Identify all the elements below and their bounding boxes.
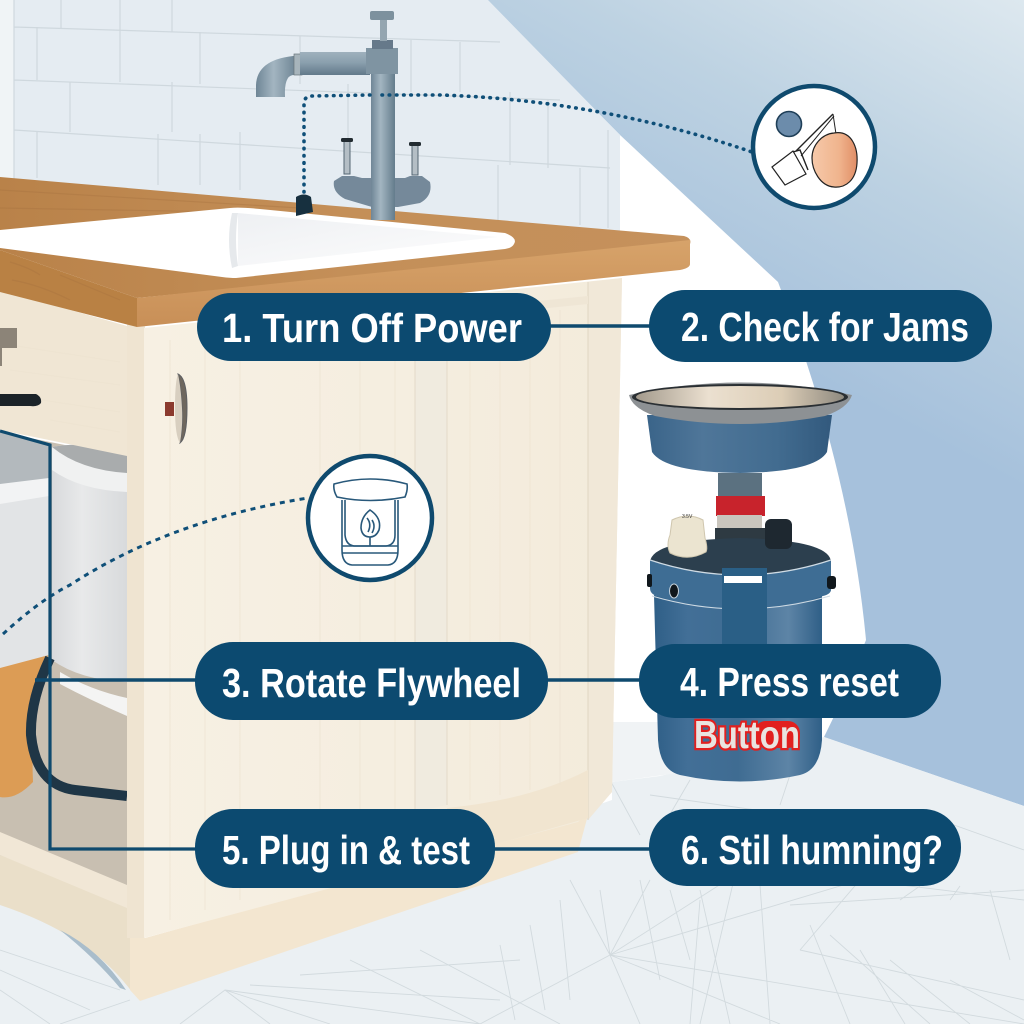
neck xyxy=(718,473,762,498)
left bucket xyxy=(0,478,49,668)
drawer handle xyxy=(0,394,41,406)
drawer xyxy=(0,290,127,456)
plinth shadow on floor xyxy=(60,930,126,990)
hose xyxy=(31,658,127,796)
plinth front xyxy=(130,815,588,1001)
step 5 pill xyxy=(195,809,495,888)
front face xyxy=(144,278,622,938)
center strap xyxy=(722,568,767,648)
red label: Button xyxy=(694,714,800,757)
housing lower body xyxy=(654,595,822,782)
step 4 pill: 4. Press reset xyxy=(680,659,899,705)
step 1 pill: 1. Turn Off Power xyxy=(222,305,522,351)
faucet xyxy=(256,11,431,220)
plinth side xyxy=(0,855,132,992)
icon: filter jar xyxy=(308,456,432,580)
cabinet handle xyxy=(178,374,187,443)
faucet handles xyxy=(334,176,431,207)
black knob xyxy=(765,519,792,549)
icon: jam check xyxy=(753,86,875,208)
sink xyxy=(0,208,515,278)
door stile xyxy=(415,320,447,812)
step 3 pill: 3. Rotate Flywheel xyxy=(222,660,521,706)
top housing xyxy=(650,538,831,581)
right bucket xyxy=(52,445,127,716)
drawer hinge xyxy=(0,328,17,366)
step 5 pill: 5. Plug in & test xyxy=(222,827,470,873)
faucet column xyxy=(371,72,395,220)
dotted cord to top icon xyxy=(304,95,752,192)
disposal unit: 3.5V xyxy=(682,514,693,520)
corner stile xyxy=(127,322,145,938)
disposal unit xyxy=(629,382,852,782)
countertop xyxy=(0,177,690,327)
blue wall xyxy=(486,0,1024,806)
faucet spout xyxy=(256,56,300,97)
step 3 pill xyxy=(195,642,548,720)
step 2 pill: 2. Check for Jams xyxy=(681,304,969,350)
floor xyxy=(0,722,1024,1024)
wood grain xyxy=(10,310,560,920)
right side strip xyxy=(588,278,622,820)
wood base item xyxy=(0,655,48,797)
step 2 pill xyxy=(649,290,992,362)
side holes xyxy=(670,584,678,598)
step 4 pill xyxy=(639,644,941,718)
dotted curve to filter icon xyxy=(3,498,308,634)
step 6 pill xyxy=(649,809,961,886)
housing rim band xyxy=(650,560,831,609)
door bottom panel xyxy=(447,770,588,858)
step 6 pill: 6. Stil humning? xyxy=(681,827,943,873)
step 1 pill xyxy=(197,293,551,361)
tiled wall xyxy=(0,0,620,232)
interior shelf xyxy=(0,832,127,908)
open cabinet interior xyxy=(0,432,130,905)
connector lines xyxy=(0,326,651,849)
cabinet body xyxy=(0,278,622,1001)
small red switch xyxy=(165,402,174,416)
white knob xyxy=(668,516,707,557)
cord plug xyxy=(296,194,313,216)
bowl xyxy=(647,415,832,473)
